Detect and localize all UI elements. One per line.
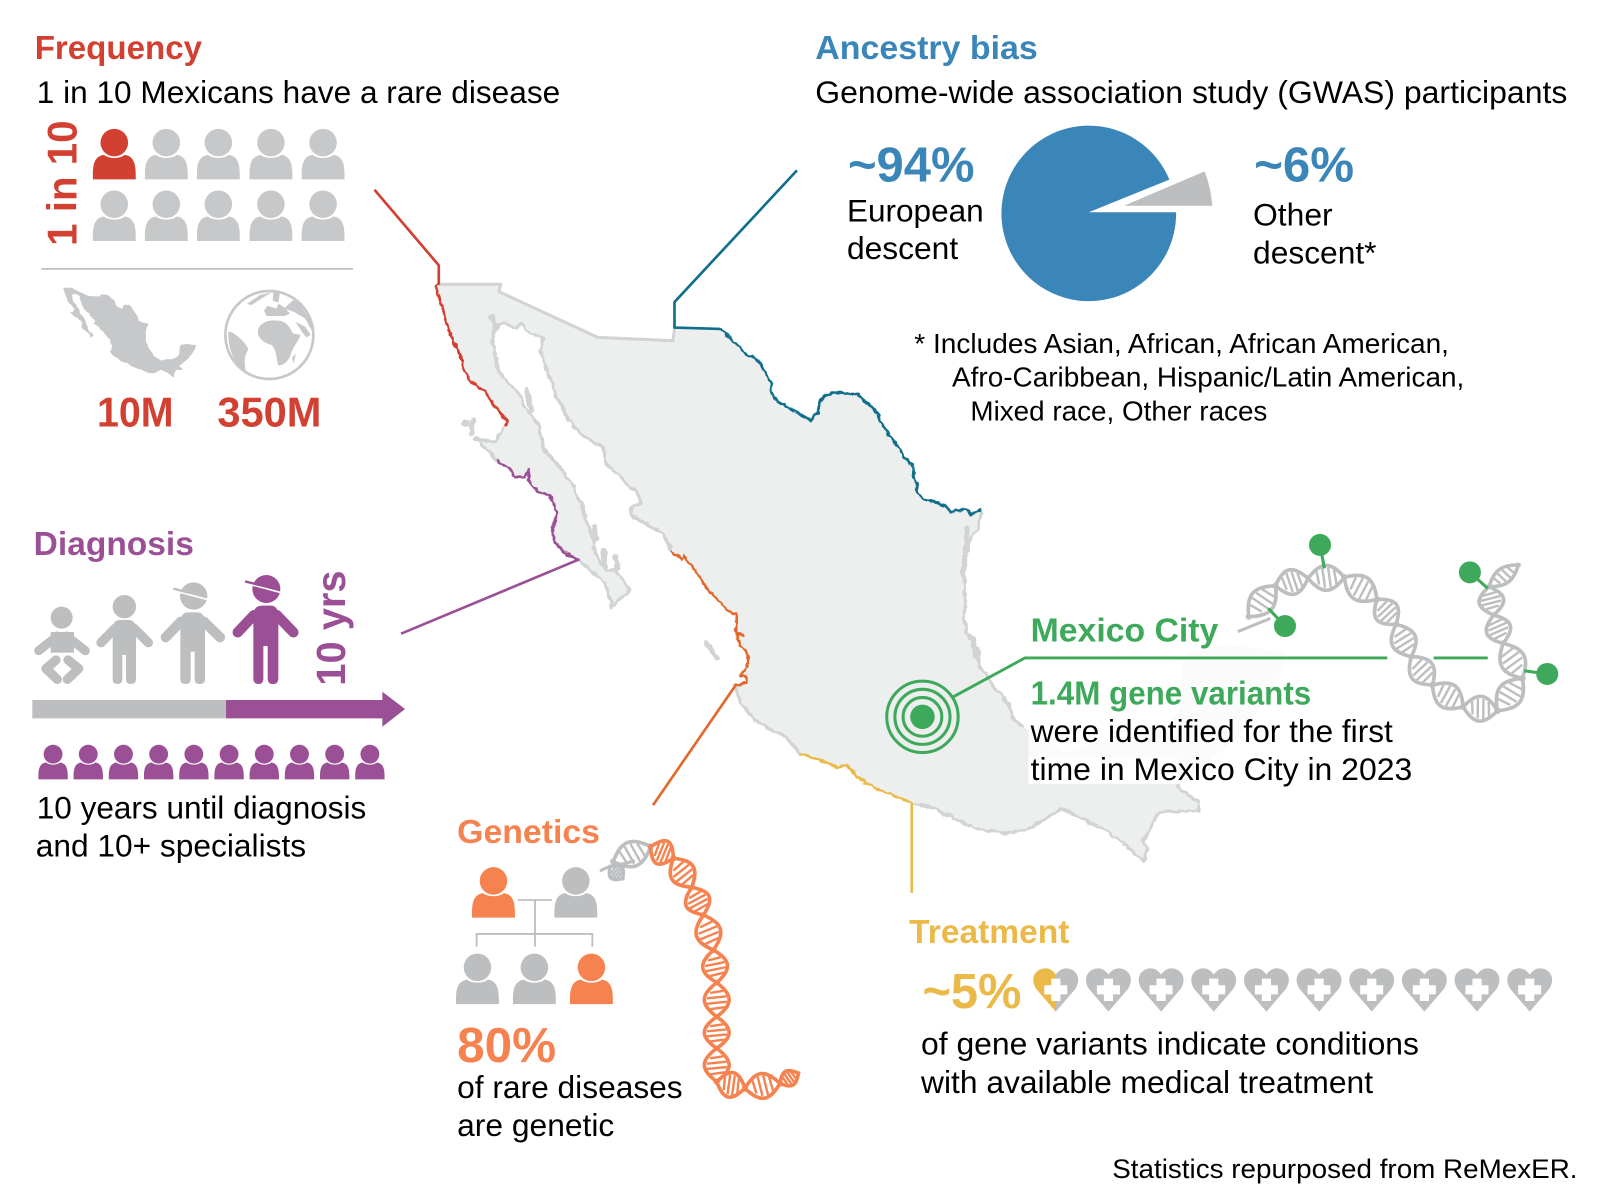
heading: diagnosis: Diagnosis [34,526,194,563]
icon: gray DNA helix with variant pins [1238,534,1558,723]
panel: treatment [909,914,1552,1100]
text: rare diseases are genetic [457,1069,683,1143]
icon: globe [225,291,313,379]
leader: treatment coast [800,753,912,893]
panel: Mexico City [887,534,1558,787]
stat: 80 percent: 80% [457,1019,556,1073]
leader: genetics coast [653,550,748,805]
stat: 350M: 350M [217,389,321,436]
target marker [887,681,958,753]
panel: ancestry bias [815,30,1567,426]
leader: ancestry coast [674,170,981,514]
icon: growth stages [39,575,293,684]
text: first identified [1030,713,1412,787]
map: Mexico [436,284,1306,862]
text: other descent: Other [1253,197,1333,233]
text: first identified: time in Mexico City in 2023 [1031,751,1412,787]
text: treatment description: with available medical treatment [920,1064,1373,1100]
icon row: ten specialists [38,745,385,779]
text: European descent: European [847,192,984,228]
rotated label: 10 yrs: 10 yrs [308,570,354,686]
panel: diagnosis [32,526,405,864]
footnote: other descent groups: * Includes Asian, African, African American, [914,328,1449,359]
heading: frequency: Frequency [35,30,202,67]
text: treatment description: of gene variants indicate conditions [921,1026,1419,1062]
source note: Statistics repurposed from ReMexER. [1112,1154,1578,1184]
leader: frequency coast [374,190,508,427]
icon: child [101,595,148,684]
stat: 10M: 10M [97,389,173,436]
text: European descent [847,192,984,266]
panel: genetics [456,814,803,1143]
icon: teen with cap [238,575,293,684]
leader: diagnosis coast [401,461,580,634]
text: other descent [1253,197,1377,270]
stat: 6 percent: ~6% [1254,139,1354,193]
text: diagnosis description [36,789,366,864]
icon: mini Mexico map [63,288,196,378]
icon: orange DNA helix [600,834,803,1101]
family tree [456,867,613,1004]
panel: frequency [35,30,560,436]
footnote: other descent groups: Afro-Caribbean, Hispanic/Latin American, [952,362,1464,393]
heading: Mexico City: Mexico City [1031,612,1219,649]
pie chart [1001,126,1212,301]
footnote: other descent groups [914,328,1464,426]
text: treatment description [920,1026,1419,1100]
text: 1 in 10 Mexicans: 1 in 10 Mexicans have a rare disease [37,74,560,110]
icon row: hearts with crosses [1033,968,1552,1012]
icon: kid with cap [166,582,220,684]
text: diagnosis description: and 10+ specialists [36,828,306,864]
text: rare diseases are genetic: of rare diseases [457,1069,683,1105]
heading: ancestry bias: Ancestry bias [815,30,1038,67]
arrow: timeline [32,692,405,727]
leader: Mexico City [953,658,1488,697]
text: first identified: were identified for the first [1030,713,1393,749]
heading: genetics: Genetics [457,814,600,851]
rotated label: 1 in 10: 1 in 10 [39,120,86,246]
text: other descent: descent* [1253,234,1377,270]
stat: 94 percent: ~94% [848,139,974,193]
stat: 5 percent: ~5% [922,965,1021,1019]
icon grid: ten people [93,129,344,241]
icon: baby [39,607,85,679]
heading: treatment: Treatment [909,914,1069,951]
stat: gene variants: 1.4M gene variants [1031,676,1311,713]
text: rare diseases are genetic: are genetic [457,1107,614,1143]
text: European descent: descent [847,230,958,266]
text: GWAS participants: Genome-wide association study (GWAS) participants [815,74,1567,110]
text: diagnosis description: 10 years until diagnosis [37,789,366,825]
footnote: other descent groups: Mixed race, Other races [970,395,1267,426]
